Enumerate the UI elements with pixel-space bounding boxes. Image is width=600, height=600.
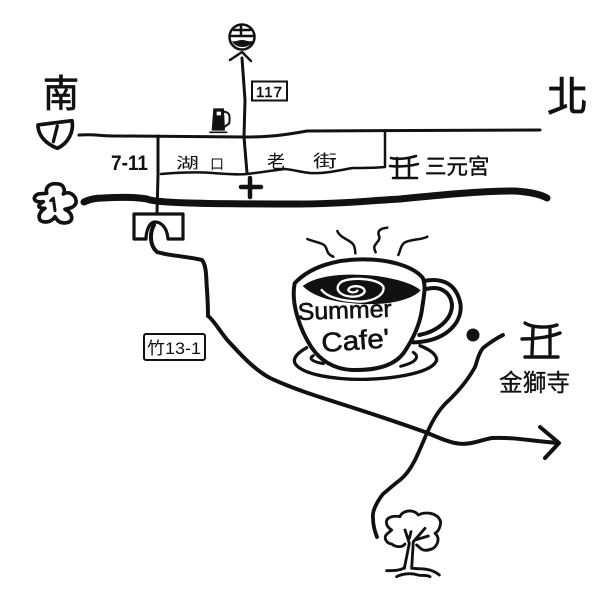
label: old street name <box>176 152 337 172</box>
label: cup text <box>297 296 392 358</box>
saucer <box>294 346 437 379</box>
road: temple road <box>373 335 503 537</box>
cup body <box>294 259 425 370</box>
saucer accents <box>311 352 417 366</box>
icon: tunnel/bridge <box>134 214 183 239</box>
road: county route 134 <box>151 225 558 444</box>
label: Sanyuan temple: 三元宮 <box>425 155 490 179</box>
icon: national road shield 1 <box>38 121 72 148</box>
icon: provincial road flower 1 <box>34 184 76 223</box>
label: cup text: Cafe' <box>320 323 390 358</box>
label: cup text: Summer <box>297 296 392 326</box>
road: main highway <box>84 191 547 204</box>
icon: mrt station marker <box>230 24 254 61</box>
label: old street name: 湖 <box>176 155 199 172</box>
sign: route zhu 134: 竹13-1 <box>147 339 201 358</box>
icon: steam <box>307 228 427 257</box>
label: Jinshi temple: 金獅寺 <box>499 370 570 397</box>
icon: beer mug <box>210 108 230 132</box>
coffee surface <box>303 275 421 304</box>
icon: coffee cup <box>294 259 461 379</box>
sign: route 117 <box>252 82 287 101</box>
label: old street name: 街 <box>313 152 337 171</box>
label: south: 南 <box>43 74 79 116</box>
label: old street name: 老 <box>267 152 285 172</box>
icon: temple gate Jinshi <box>522 323 560 357</box>
label: north: 北 <box>547 74 588 120</box>
coffee swirl <box>322 279 384 302</box>
road: 7-11 lane <box>157 136 158 213</box>
icon: tree <box>385 511 441 577</box>
label: old street name: 口 <box>210 156 224 172</box>
icon: church cross <box>241 178 261 197</box>
road: north avenue <box>242 58 247 173</box>
icon: location dot <box>466 328 480 342</box>
icon: temple gate Sanyuan <box>390 156 418 178</box>
label: 7-11: 7-11 <box>111 152 148 175</box>
road: old street outline <box>161 131 385 174</box>
arrow head <box>540 427 559 458</box>
sign: route 117: 117 <box>256 84 282 101</box>
road: top street <box>79 130 540 137</box>
sign: route zhu 134 <box>144 334 205 360</box>
cup handle <box>413 280 461 342</box>
